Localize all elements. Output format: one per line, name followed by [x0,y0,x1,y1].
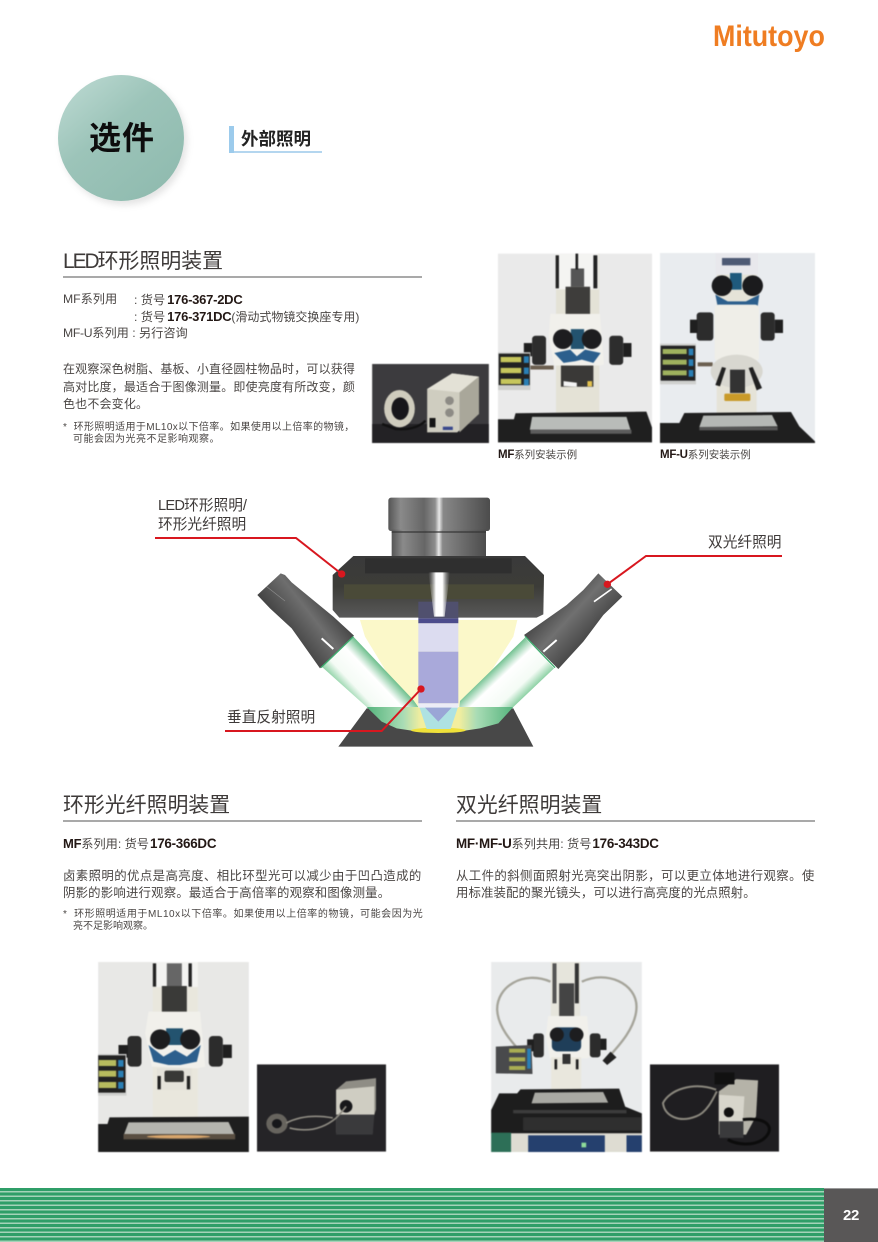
label: LED环形照明/环形光纤照明: LED环形照明/ [158,498,247,514]
caption: MF-U installation example: MF-U系列安装示例 [660,449,751,461]
heading: 双光纤照明装置: 双光纤照明装置 [456,794,602,817]
photo: microscope with dual fiber [490,962,643,1153]
leader line: dual fiber [604,556,782,588]
footer: green striped band [0,1188,824,1242]
text block: dual fiber description: 用标准装配的聚光镜头，可以进行高亮度的光点照射。 [456,886,756,900]
heading: 环形光纤照明装置: 环形光纤照明装置 [63,794,230,817]
footnote: fiber ring [63,908,423,932]
category tag: 外部照明 [229,126,322,153]
caption: MF installation example: MF系列安装示例 [498,449,577,461]
text block: fiber ring description: 阴影的影响进行观察。最适合于高倍率的观察和图像测量。 [63,886,390,900]
text block: dual fiber description: 从工件的斜侧面照射光亮突出阴影，可以更立体地进行观察。使 [456,869,815,883]
heading: LED环形照明装置: LED环形照明装置 [63,250,223,273]
footer: page number 22: 22 [843,1207,859,1224]
spec list: LED ring part numbers: : 货号176-371DC(滑动式物镜交换座专用) [134,309,359,324]
text block: LED ring description [63,362,355,411]
photo: MF installation example [497,252,653,444]
ring light housing [333,556,544,618]
footnote: LED ring: 可能会因为光亮不足影响观察。 [73,434,220,445]
photo: microscope with fiber ring [97,962,250,1153]
text block: fiber ring description: 卤素照明的优点是高亮度、相比环型光可以减少由于凹凸造成的 [63,869,422,883]
section badge: 选件 [58,75,184,201]
spec list: LED ring part numbers: MF系列用 [63,292,117,306]
photo: fiber ring and light source [256,1064,387,1152]
text block: LED ring description: 色也不会变化。 [63,397,148,411]
spec: dual fiber part number: MF·MF-U系列共用: 货号176-343DC [456,836,659,851]
objective: upper barrel [388,498,490,556]
spec: fiber ring part number: MF系列用: 货号176-366DC [63,836,216,851]
text block: dual fiber description [456,869,815,900]
label: 垂直反射照明: 垂直反射照明 [227,710,315,726]
logo: Mitutoyo: Mitutoyo [713,20,825,53]
spec list: LED ring part numbers: MF-U系列用 : 另行咨询 [63,326,188,340]
light: green pool on workpiece [367,707,513,732]
photo: LED ring light and controller [371,363,490,444]
fiber head: right [524,573,622,669]
label: LED环形照明/环形光纤照明: 环形光纤照明 [158,517,246,533]
spec list: LED ring part numbers [63,292,359,340]
section badge: 选件: 选件 [89,120,155,156]
text block: LED ring description: 高对比度，最适合于图像测量。即使亮度有所改变，颜 [63,380,355,394]
fiber head: left [257,573,354,668]
light: left fiber beam [322,637,418,707]
light: focal spot [411,728,466,733]
text block: LED ring description: 在观察深色树脂、基板、小直径圆柱物品时，可以获得 [63,362,355,376]
footnote: LED ring: * 环形照明适用于ML10x以下倍率。如果使用以上倍率的物镜， [63,422,355,433]
footnote: fiber ring: 亮不足影响观察。 [73,921,153,932]
spec list: LED ring part numbers: : 货号176-367-2DC [134,292,242,307]
photo: MF-U installation example [659,253,816,444]
text block: fiber ring description [63,869,422,900]
footnote: LED ring [63,421,355,445]
photo: dual fiber and light source [649,1064,780,1152]
footnote: fiber ring: * 环形照明适用于ML10x以下倍率。如果使用以上倍率的物镜，可能会因为光 [63,909,423,920]
leader line: vertical reflected [225,685,425,731]
light: vertical reflected beam [418,618,458,729]
light: right fiber beam [459,638,554,707]
light: ring illumination cone [360,620,517,707]
label: LED环形照明/环形光纤照明 [158,498,247,533]
leader line: ring light [155,538,345,578]
category tag: 外部照明: 外部照明 [241,129,311,149]
label: 双光纤照明: 双光纤照明 [708,535,781,551]
diagram: illumination types [155,498,782,747]
footer: page number 22 [824,1188,878,1242]
plate: workpiece [338,708,533,747]
